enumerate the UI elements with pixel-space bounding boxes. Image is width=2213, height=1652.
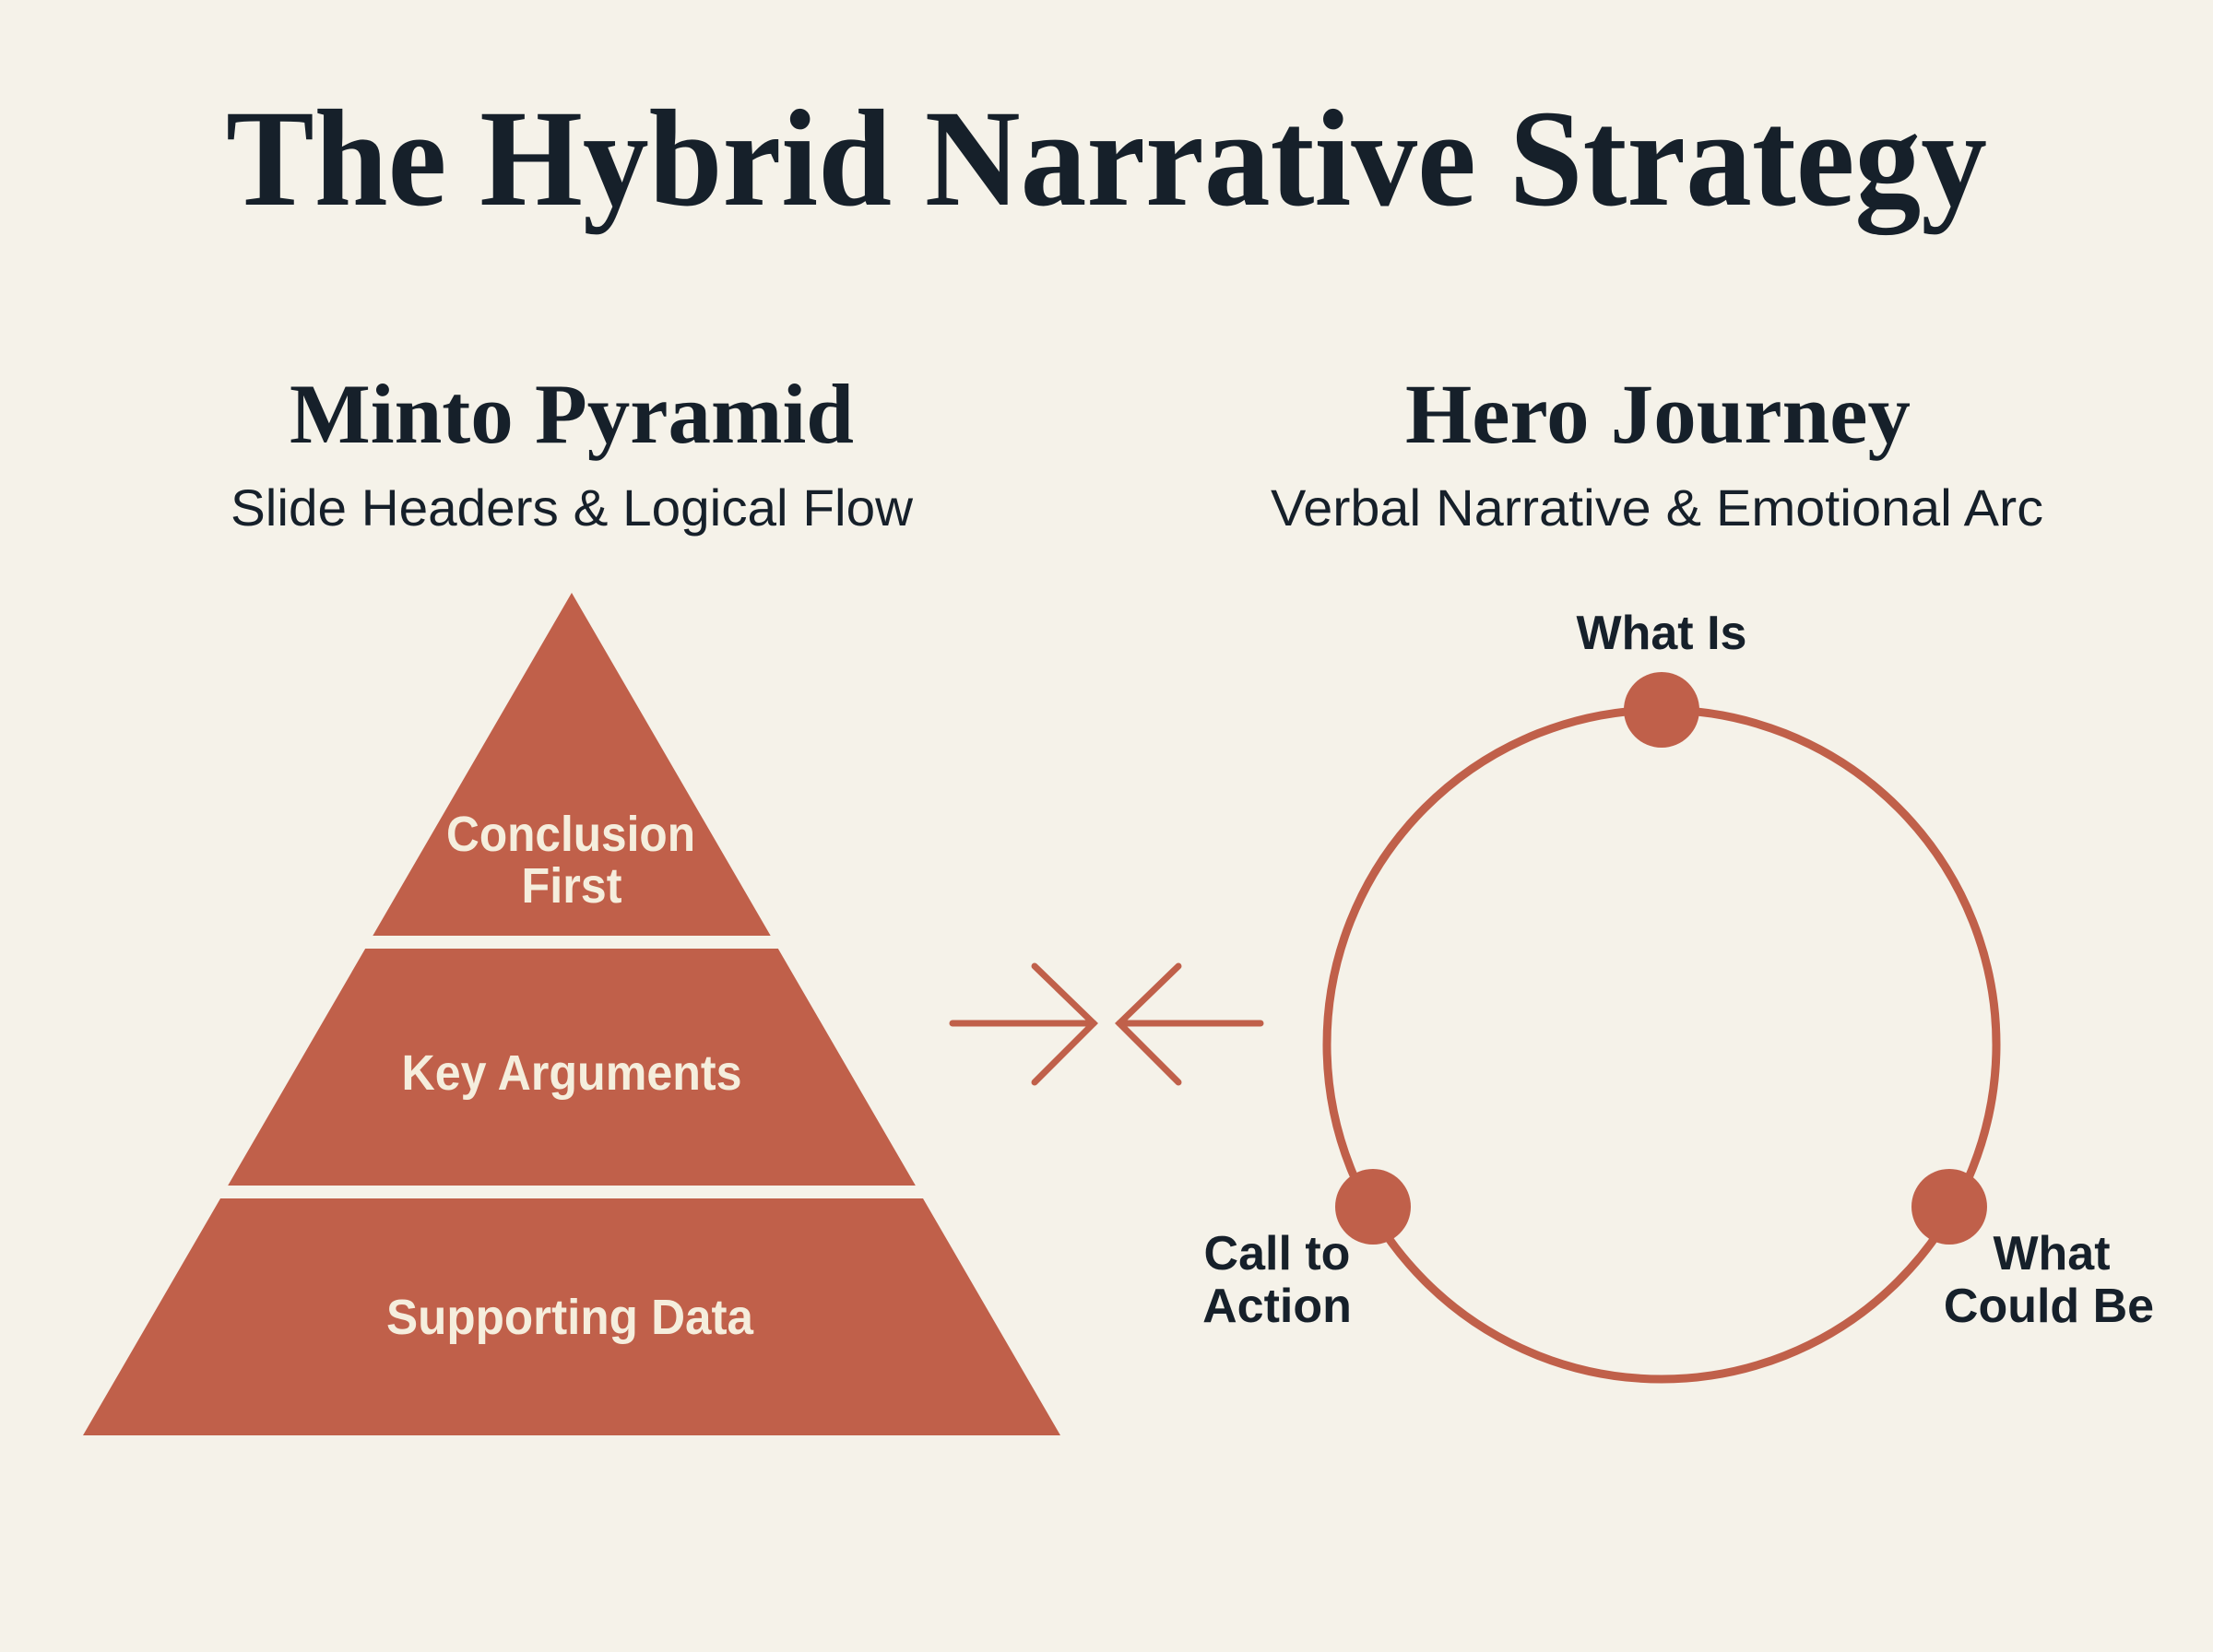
cycle diagram: [1202, 607, 2154, 1379]
pyramid level: conclusion first: [446, 807, 695, 914]
node: call to action: [1335, 1169, 1411, 1245]
label: what is: What Is: [1577, 607, 1746, 660]
label: what could be: Could Be: [1944, 1280, 2154, 1333]
label: call to action: Action: [1202, 1280, 1352, 1333]
panel: minto pyramid: [0, 367, 1199, 1435]
node: what is: [1624, 672, 1699, 748]
arrows: converging: [953, 966, 1260, 1082]
heading: minto pyramid: Minto Pyramid: [290, 367, 854, 461]
panel: hero journey: [1202, 367, 2154, 1379]
subtitle: hero: Verbal Narrative & Emotional Arc: [1271, 478, 2043, 537]
subtitle: minto: Slide Headers & Logical Flow: [231, 478, 914, 537]
pyramid chart: [0, 593, 1199, 1435]
label: call to action: Call to: [1204, 1227, 1350, 1280]
pyramid level: conclusion first: Conclusion: [446, 807, 695, 862]
pyramid level: conclusion first: First: [522, 858, 622, 914]
node: what could be: [1911, 1169, 1987, 1245]
pyramid level: key arguments: Key Arguments: [402, 1045, 741, 1101]
heading: hero journey: Hero Journey: [1405, 367, 1911, 461]
title: The Hybrid Narrative Strategy: [226, 82, 1987, 235]
pyramid level: supporting data: Supporting Data: [386, 1290, 754, 1345]
label: what could be: What: [1993, 1227, 2111, 1280]
